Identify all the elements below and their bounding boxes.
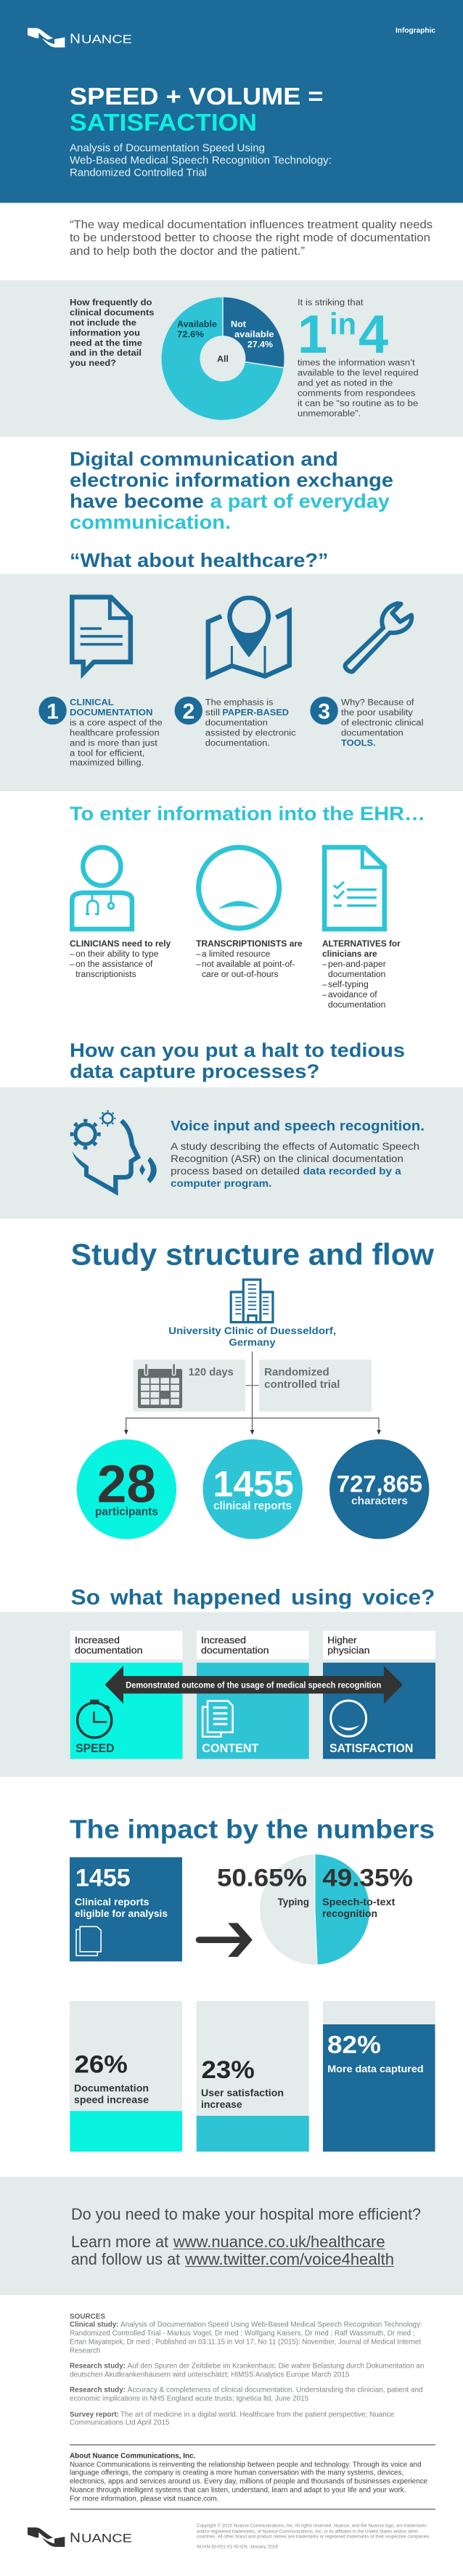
text: alternatives: avoidance of bbox=[328, 991, 377, 999]
circle: 727,865 characters: characters bbox=[351, 1495, 408, 1508]
bar: 26% documentation speed: speed increase bbox=[74, 2095, 149, 2106]
text: transcriptionists: a limited resource bbox=[202, 950, 270, 959]
point 1: clinical documentation: CLINICAL bbox=[70, 699, 114, 708]
panel: call to action: and follow us at bbox=[71, 2250, 180, 2268]
donut chart: All bbox=[217, 356, 229, 364]
stat: 1 in 4: in bbox=[329, 307, 356, 341]
circle: 727,865 characters bbox=[329, 1439, 429, 1539]
text: clinicians bbox=[70, 940, 171, 979]
stat: 1 in 4: times the information wasn’t bbox=[298, 359, 416, 368]
title bbox=[70, 83, 324, 136]
label: Infographic: Infographic bbox=[396, 27, 435, 35]
point 3: tools: Why? Because of bbox=[341, 699, 414, 708]
heading: study structure and flow: Study structure and flow bbox=[71, 1238, 434, 1272]
sources: Auf den Spuren der Zeitdiebe im Krankenhaus: Die wahre Belastung durch Dokumentation an bbox=[128, 2363, 424, 2371]
outcome column: satisfaction bbox=[323, 1631, 435, 1759]
stat: 1 in 4 bbox=[298, 299, 419, 419]
outcome column: speed: SPEED bbox=[75, 1741, 115, 1755]
double arrow: demonstrated outcome bbox=[105, 1666, 403, 1704]
sources: economic implications in NHS England acute trusts; Ignetica ltd, June 2015 bbox=[70, 2395, 309, 2403]
sources: Clinical study: bbox=[70, 2321, 119, 2329]
sources: Research study: bbox=[70, 2363, 126, 2371]
outcome column: content: Increased bbox=[201, 1635, 246, 1645]
stat: 1 in 4: 1 bbox=[298, 304, 327, 364]
label: university clinic: Germany bbox=[229, 1337, 276, 1348]
heading: digital communication: have become bbox=[70, 490, 204, 512]
heading: tedious data capture: How can you put a halt to tedious bbox=[70, 1039, 405, 1061]
text: voice input and speech recognition: Recognition (ASR) on the clinical documentation bbox=[171, 1153, 403, 1164]
outcome column: speed: documentation bbox=[75, 1645, 143, 1656]
icon: hospital building bbox=[231, 1280, 273, 1322]
panel: voice outcomes bbox=[0, 1612, 463, 1777]
bar: 26% documentation speed: 26% bbox=[74, 2051, 128, 2079]
text: voice input and speech recognition: Voice input and speech recognition. bbox=[171, 1118, 425, 1134]
double arrow: demonstrated outcome: Demonstrated outcome of the usage of medical speech recognition bbox=[126, 1681, 381, 1690]
point 3: tools bbox=[310, 697, 424, 748]
box: randomized controlled trial: Randomized bbox=[264, 1367, 329, 1378]
text: clinicians: – bbox=[70, 950, 75, 959]
question text: information you bbox=[70, 330, 140, 338]
about Nuance: For more information, please visit nuance.com. bbox=[70, 2495, 219, 2503]
point 3: tools: the poor usability bbox=[341, 709, 413, 718]
text: clinicians: on the assistance of bbox=[75, 960, 153, 969]
about Nuance: Nuance Communications is reinventing the relationship between people and technology. Through its voice and bbox=[70, 2461, 422, 2469]
question text: need at the time bbox=[70, 340, 142, 348]
point 2: paper-based: assisted by electronic bbox=[205, 729, 296, 738]
point 3: tools: of electronic clinical bbox=[341, 719, 424, 728]
icon: map pin bbox=[208, 596, 290, 676]
bar: 82% more data: More data captured bbox=[327, 2064, 424, 2074]
text: transcriptionists: – bbox=[196, 950, 201, 959]
heading: enter information into EHR: To enter information into the EHR… bbox=[70, 803, 425, 825]
heading: digital communication bbox=[70, 449, 393, 533]
donut chart bbox=[162, 298, 284, 420]
text: alternatives bbox=[322, 940, 401, 1010]
logo: Nuance: N bbox=[70, 30, 81, 46]
flow connector arrows bbox=[124, 1352, 381, 1435]
footer logo: Nuance: N bbox=[70, 2530, 81, 2545]
text: alternatives: pen-and-paper bbox=[328, 960, 386, 969]
circle: 1455 clinical reports: 1455 bbox=[213, 1464, 294, 1505]
bar: 23% user satisfaction bbox=[197, 2001, 309, 2151]
circle: 727,865 characters: 727,865 bbox=[337, 1471, 422, 1497]
sources: Communications Ltd April 2015 bbox=[70, 2419, 170, 2427]
outcome column: satisfaction: Higher bbox=[327, 1635, 357, 1645]
logo: Nuance: UANCE bbox=[81, 33, 132, 46]
sources: Randomized Controlled Trial - Markus Vogel, Dr med ; Wolfgang Kaisers, Dr med ; Ralf Wassmuth, Dr med ; bbox=[70, 2330, 415, 2338]
question text: clinical documents bbox=[70, 309, 154, 318]
sources: SOURCES bbox=[70, 2313, 105, 2321]
about Nuance bbox=[70, 2445, 435, 2509]
donut chart: 72.6% bbox=[177, 331, 204, 340]
card: 1455 clinical reports: Clinical reports bbox=[75, 1897, 149, 1908]
sources: Research study: bbox=[70, 2387, 126, 2395]
outcome column: content bbox=[197, 1631, 309, 1759]
pie chart: typing vs speech-to-text: recognition bbox=[322, 1908, 377, 1919]
icon: documents bbox=[202, 1701, 233, 1737]
sources: Ertan Mayatepek, Dr med ; Published on 03.11.15 in Vol 17, No 11 (2015): November, Journal of Medical Internet bbox=[70, 2339, 421, 2347]
subtitle: Randomized Controlled Trial bbox=[70, 167, 207, 179]
point 1: clinical documentation: a tool for efficient, bbox=[70, 750, 144, 759]
box: 120 days bbox=[134, 1359, 245, 1412]
label: university clinic: University Clinic of Duesseldorf, bbox=[168, 1325, 336, 1336]
heading: digital communication: electronic information exchange bbox=[70, 470, 393, 491]
copyright: Copyright © 2016 Nuance Communications, Inc. All rights reserved. Nuance, and the Nuance logo, are trademarks bbox=[197, 2523, 427, 2529]
subtitle bbox=[70, 142, 332, 179]
icon: clinician bbox=[72, 847, 132, 929]
point 2: paper-based: documentation. bbox=[205, 740, 270, 748]
heading: tedious data capture: data capture processes? bbox=[70, 1060, 319, 1082]
sources: deutschen Akutkrankenhäusern wird unterschätzt; HIMSS Analytics Europe March 2015 bbox=[70, 2371, 350, 2379]
circle: 1455 clinical reports: clinical reports bbox=[213, 1500, 292, 1512]
about Nuance: language offerings, the company is creating a more human conversation with the many systems, devices, bbox=[70, 2469, 403, 2477]
point 2: paper-based: The emphasis is bbox=[205, 699, 274, 708]
text: voice input and speech recognition: A study describing the effects of Automatic Speech bbox=[171, 1140, 419, 1152]
pie chart: typing vs speech-to-text: Typing bbox=[277, 1897, 309, 1908]
heading: digital communication: a part of everyday bbox=[210, 490, 390, 512]
icon: sad face bbox=[199, 848, 279, 928]
donut chart: Available bbox=[177, 321, 217, 330]
question text bbox=[70, 299, 154, 368]
quote: and to help both the doctor and the patient.” bbox=[70, 245, 305, 258]
bar: 82% more data bbox=[323, 2001, 435, 2151]
icon: document speech bubble bbox=[72, 597, 131, 673]
panel: availability survey bbox=[0, 280, 463, 437]
bar: 23% user satisfaction: 23% bbox=[202, 2056, 255, 2084]
point 3: tools: documentation bbox=[341, 729, 403, 738]
outcome column: speed bbox=[70, 1631, 183, 1759]
arrow bbox=[196, 1923, 253, 1957]
bar: 23% user satisfaction: User satisfaction bbox=[201, 2088, 284, 2098]
bar: 26% documentation speed: Documentation bbox=[74, 2083, 149, 2094]
copyright bbox=[197, 2523, 430, 2550]
card: 1455 clinical reports: eligible for analysis bbox=[75, 1908, 168, 1919]
about Nuance: Nuance through intelligent systems that can listen, understand, learn and adapt to your life and your work. bbox=[70, 2486, 406, 2495]
question text: not include the bbox=[70, 319, 136, 328]
text: voice input and speech recognition bbox=[171, 1118, 425, 1189]
box: randomized controlled trial: controlled trial bbox=[264, 1379, 340, 1391]
text: alternatives: documentation bbox=[328, 1001, 385, 1010]
point 3: tools: TOOLS. bbox=[341, 740, 376, 748]
circle: 28 participants: participants bbox=[95, 1506, 158, 1518]
bar: 82% more data: 82% bbox=[327, 2031, 381, 2058]
outcome column: satisfaction: SATISFACTION bbox=[329, 1741, 413, 1755]
quote: to be understood better to choose the right mode of documentation bbox=[70, 232, 430, 245]
heading: impact by the numbers: The impact by the numbers bbox=[70, 1814, 435, 1844]
about Nuance: electronics, apps and services around us. Every day, millions of people and thousands of businesses experience bbox=[70, 2477, 427, 2486]
panel: hero header bbox=[0, 0, 463, 203]
point 1: clinical documentation: healthcare profession bbox=[70, 729, 160, 738]
sources: Research bbox=[70, 2347, 100, 2355]
sources bbox=[70, 2313, 424, 2427]
stat: 1 in 4: unmemorable”. bbox=[298, 410, 361, 419]
icon: wrench bbox=[345, 603, 411, 671]
copyright: countries. All other brand and product names are trademarks or registered trademarks of their respective companies. bbox=[197, 2535, 430, 2540]
panel: call to action: www.twitter.com/voice4health bbox=[184, 2250, 394, 2268]
bar: 26% documentation speed bbox=[70, 2001, 182, 2151]
donut chart: 27.4% bbox=[247, 341, 273, 350]
stat: 1 in 4: it can be “so routine as to be bbox=[298, 400, 418, 409]
point 2: paper-based: 2 bbox=[182, 700, 194, 724]
box: randomized controlled trial bbox=[259, 1359, 372, 1412]
stat: 1 in 4: comments from respondees bbox=[298, 390, 416, 398]
text: voice input and speech recognition: computer program. bbox=[171, 1177, 271, 1189]
circle: 28 participants bbox=[77, 1439, 176, 1539]
point 2: paper-based bbox=[175, 697, 296, 748]
copyright: and/or registered trademarks, of Nuance Communications, Inc. or its affiliates in the United States and/or other bbox=[197, 2529, 419, 2534]
card: 1455 clinical reports bbox=[70, 1857, 182, 1961]
panel: healthcare three points bbox=[0, 574, 463, 791]
pie chart: typing vs speech-to-text: 49.35% bbox=[322, 1864, 413, 1892]
question text: you need? bbox=[70, 359, 116, 368]
heading: so what happened using voice: So what happened using voice? bbox=[71, 1586, 435, 1610]
point 1: clinical documentation: maximized billing. bbox=[70, 759, 144, 767]
quote: “The way medical documentation influences treatment quality needs bbox=[70, 218, 433, 231]
panel: call to action: Do you need to make your hospital more efficient? bbox=[71, 2205, 421, 2223]
question text: How frequently do bbox=[70, 299, 152, 308]
copyright: NUAN-DI-001-01-IG-EN, January 2016 bbox=[197, 2545, 278, 2550]
text: transcriptionists bbox=[196, 940, 303, 979]
donut chart: Not bbox=[231, 321, 246, 330]
point 1: clinical documentation bbox=[38, 697, 163, 767]
text: clinicians: CLINICIANS need to rely bbox=[70, 940, 171, 949]
text: alternatives: – bbox=[322, 981, 327, 989]
text: alternatives: – bbox=[322, 960, 327, 969]
text: alternatives: documentation bbox=[328, 970, 385, 979]
sources: The art of medicine in a digital world. Healthcare from the patient perspective; Nuance bbox=[120, 2411, 395, 2419]
text: transcriptionists: – bbox=[196, 960, 201, 969]
text: alternatives: ALTERNATIVES for bbox=[322, 940, 401, 949]
text: clinicians: transcriptionists bbox=[75, 970, 136, 979]
point 2: paper-based: still bbox=[205, 709, 220, 718]
outcome column: satisfaction: physician bbox=[327, 1645, 370, 1656]
text: voice input and speech recognition: data recorded by a bbox=[303, 1165, 401, 1177]
circle: 1455 clinical reports bbox=[203, 1439, 303, 1539]
subtitle: Web-Based Medical Speech Recognition Technology: bbox=[70, 155, 332, 166]
text: transcriptionists: TRANSCRIPTIONISTS are bbox=[196, 940, 303, 949]
icon: documents bbox=[76, 1926, 101, 1955]
sources: Accuracy & completeness of clinical documentation. Understanding the clinician, patient and bbox=[128, 2387, 423, 2395]
box: 120 days: 120 days bbox=[189, 1367, 234, 1378]
pie chart: typing vs speech-to-text: Speech-to-text bbox=[322, 1897, 396, 1908]
point 1: clinical documentation: DOCUMENTATION bbox=[70, 709, 152, 718]
icon: smiling face bbox=[331, 1701, 366, 1736]
about Nuance: About Nuance Communications, Inc. bbox=[70, 2452, 195, 2461]
outcome column: content: CONTENT bbox=[202, 1741, 259, 1755]
label: university clinic bbox=[168, 1325, 336, 1348]
panel: call to action: www.nuance.co.uk/healthcare bbox=[173, 2233, 385, 2251]
point 3: tools: 3 bbox=[318, 700, 330, 724]
panel: call to action: Learn more at bbox=[71, 2233, 168, 2251]
point 1: clinical documentation: is a core aspect of the bbox=[70, 719, 163, 728]
footer logo: Nuance: UANCE bbox=[81, 2532, 132, 2545]
point 1: clinical documentation: and is more than just bbox=[70, 740, 158, 748]
point 2: paper-based: PAPER-BASED bbox=[222, 709, 289, 718]
text: alternatives: self-typing bbox=[328, 981, 369, 989]
subtitle: Analysis of Documentation Speed Using bbox=[70, 142, 265, 154]
heading: digital communication: communication. bbox=[70, 511, 231, 533]
circle: 28 participants: 28 bbox=[97, 1455, 156, 1513]
pie chart: typing vs speech-to-text bbox=[217, 1855, 413, 1965]
point 1: clinical documentation: 1 bbox=[46, 700, 59, 724]
pie chart: typing vs speech-to-text: 50.65% bbox=[217, 1864, 307, 1892]
card: 1455 clinical reports: 1455 bbox=[75, 1864, 131, 1892]
icon: head with gears and sound bbox=[72, 1111, 157, 1195]
text: voice input and speech recognition: process based on detailed bbox=[171, 1165, 300, 1177]
text: transcriptionists: not available at point-of- bbox=[202, 960, 295, 969]
stat: 1 in 4: available to the level required bbox=[298, 369, 419, 378]
logo: Nuance bbox=[28, 28, 132, 47]
stat: 1 in 4: and yet as noted in the bbox=[298, 380, 393, 388]
footer logo: Nuance bbox=[28, 2527, 132, 2547]
point 2: paper-based: documentation bbox=[205, 719, 268, 728]
text: alternatives: – bbox=[322, 991, 327, 999]
icon: stopwatch bbox=[78, 1700, 112, 1738]
panel: voice input bbox=[0, 1087, 463, 1219]
outcome column: speed: Increased bbox=[75, 1635, 120, 1645]
title: SPEED + VOLUME = bbox=[70, 83, 324, 110]
icon: calendar bbox=[138, 1364, 182, 1408]
text: clinicians: on their ability to type bbox=[75, 950, 158, 959]
sources: Survey report: bbox=[70, 2411, 119, 2419]
heading: what about healthcare: “What about healthcare?” bbox=[70, 549, 328, 571]
stat: 1 in 4: 4 bbox=[358, 304, 388, 364]
title: SATISFACTION bbox=[70, 110, 257, 136]
icon: checklist document bbox=[324, 847, 385, 929]
outcome column: content: documentation bbox=[201, 1645, 269, 1656]
stat: 1 in 4: It is striking that bbox=[298, 299, 364, 308]
text: transcriptionists: care or out-of-hours bbox=[202, 970, 279, 979]
bar: 23% user satisfaction: increase bbox=[201, 2099, 242, 2110]
question text: and in the detail bbox=[70, 349, 142, 358]
heading: digital communication: Digital communication and bbox=[70, 449, 338, 470]
heading: tedious data capture bbox=[70, 1039, 405, 1082]
text: alternatives: clinicians are bbox=[322, 950, 377, 959]
panel: call to action bbox=[0, 2177, 463, 2295]
text: clinicians: – bbox=[70, 960, 75, 969]
sources: Analysis of Documentation Speed Using Web-Based Medical Speech Recognition Technology: bbox=[120, 2321, 422, 2329]
quote bbox=[70, 218, 433, 258]
donut chart: available bbox=[234, 331, 274, 340]
